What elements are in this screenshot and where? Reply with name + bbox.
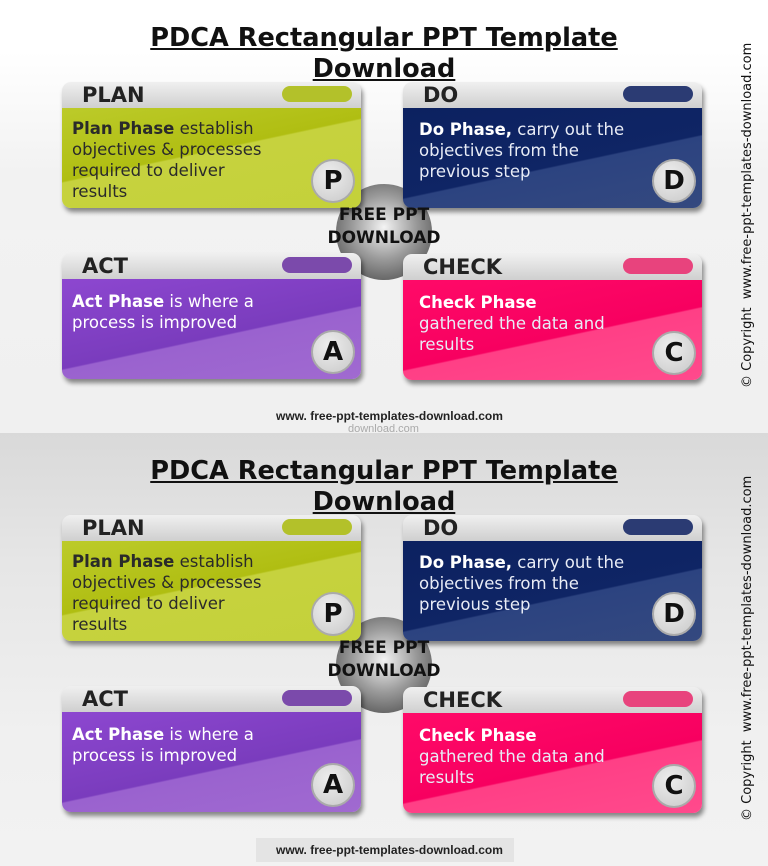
title: Download: [313, 487, 455, 517]
panel: check: Check Phase: [419, 726, 537, 745]
panel: plan: PLAN: [82, 83, 145, 107]
panel: check: C: [664, 771, 684, 801]
slide 1: [0, 0, 768, 433]
panel: check: gathered the data and: [419, 314, 605, 333]
panel: plan: results: [72, 182, 127, 201]
center label: DOWNLOAD: [327, 661, 441, 681]
panel: act: process is improved: [72, 313, 237, 332]
panel: plan: required to deliver: [72, 594, 225, 613]
center label: [327, 638, 441, 681]
panel: act: Act Phase is where a: [72, 292, 254, 311]
panel: plan: P: [323, 166, 343, 196]
center sphere: [336, 617, 432, 713]
panel: act: ACT: [82, 687, 128, 711]
panel: act: A: [323, 770, 343, 800]
panel: do: Do Phase, carry out the: [419, 120, 624, 139]
panel: act: [62, 253, 361, 379]
panel: plan: [62, 515, 361, 641]
panel: act: Act Phase is where a: [72, 725, 254, 744]
panel: check: gathered the data and: [419, 747, 605, 766]
panel: do: DO: [423, 83, 458, 107]
panel: act: process is improved: [72, 746, 237, 765]
panel: do: [403, 82, 702, 208]
panel: plan: Plan Phase establish: [72, 552, 254, 571]
panel: check: results: [419, 335, 474, 354]
slide 2: [0, 433, 768, 866]
title: [150, 23, 618, 84]
panel: act: ACT: [82, 254, 128, 278]
panel: do: previous step: [419, 162, 530, 181]
panel: do: [403, 515, 702, 641]
panel: do: objectives from the: [419, 574, 579, 593]
panel: plan: PLAN: [82, 516, 145, 540]
panel: plan: objectives & processes: [72, 573, 261, 592]
footer url: [256, 838, 514, 862]
copyright: © Copyright www.free-ppt-templates-download.com: [740, 476, 755, 821]
panel: do: previous step: [419, 595, 530, 614]
footer url: www. free-ppt-templates-download.com: [276, 409, 503, 423]
panel: act: [62, 686, 361, 812]
panel: check: Check Phase: [419, 293, 537, 312]
center sphere: [336, 184, 432, 280]
panel: do: D: [663, 599, 685, 629]
title: Download: [313, 54, 455, 84]
panel: do: DO: [423, 516, 458, 540]
panel: plan: results: [72, 615, 127, 634]
panel: check: CHECK: [423, 255, 502, 279]
panel: plan: required to deliver: [72, 161, 225, 180]
panel: do: D: [663, 166, 685, 196]
center label: DOWNLOAD: [327, 228, 441, 248]
center label: FREE PPT: [339, 638, 429, 658]
footer url: www. free-ppt-templates-download.com: [276, 843, 503, 857]
panel: plan: [62, 82, 361, 208]
panel: check: results: [419, 768, 474, 787]
panel: plan: objectives & processes: [72, 140, 261, 159]
panel: check: CHECK: [423, 688, 502, 712]
panel: act: A: [323, 337, 343, 367]
title: [150, 456, 618, 517]
title: PDCA Rectangular PPT Template: [150, 456, 618, 486]
center label: FREE PPT: [339, 205, 429, 225]
panel: do: Do Phase, carry out the: [419, 553, 624, 572]
panel: check: [403, 687, 702, 813]
copyright: © Copyright www.free-ppt-templates-download.com: [740, 43, 755, 388]
panel: plan: P: [323, 599, 343, 629]
panel: check: C: [664, 338, 684, 368]
center label: [327, 205, 441, 248]
panel: check: [403, 254, 702, 380]
panel: do: objectives from the: [419, 141, 579, 160]
title: PDCA Rectangular PPT Template: [150, 23, 618, 53]
panel: plan: Plan Phase establish: [72, 119, 254, 138]
